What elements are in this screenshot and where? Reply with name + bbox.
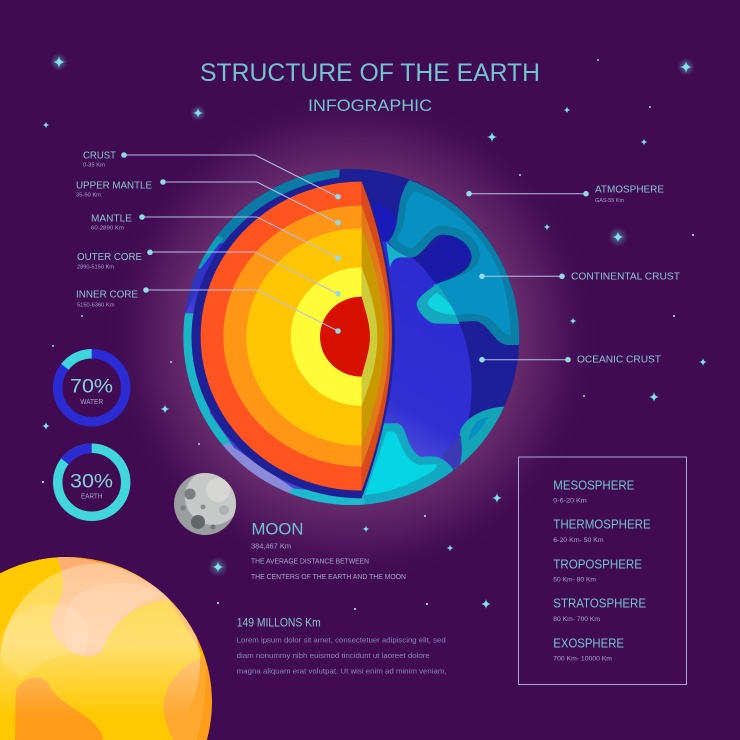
distance text: magna aliquam erat volutpat. Ut wisi enim ad minim veniam,: [237, 666, 447, 675]
continental crust: [388, 180, 519, 345]
donut: earth 30%: EARTH: [81, 494, 102, 501]
moon text: THE AVERAGE DISTANCE BETWEEN: [251, 559, 369, 566]
inner core line: [146, 290, 338, 331]
mesosphere: [553, 477, 635, 505]
south east island: [454, 406, 504, 470]
outer core line: [150, 252, 338, 294]
outer core label: [77, 251, 142, 270]
upper mantle line: [163, 182, 338, 223]
leader lines left: [121, 152, 341, 334]
moon: [174, 473, 236, 535]
right labels: [571, 183, 681, 366]
moon text: [251, 519, 406, 581]
highlighted ocean: [183, 240, 472, 505]
exosphere: [553, 635, 624, 662]
outer core label: 2890-5150 Km: [77, 264, 114, 270]
atmosphere layers panel: [518, 457, 686, 684]
outer core layer: [290, 267, 362, 406]
upper mantle label: [76, 179, 152, 199]
moon text: 384,467 Km: [251, 543, 291, 550]
troposphere: [553, 556, 642, 583]
inner core label: [76, 288, 138, 308]
atmosphere label: GAS-55 Km: [595, 198, 624, 204]
stratosphere: [553, 596, 646, 623]
inner core label: 5150-6360 Km: [77, 302, 115, 308]
lake: [418, 235, 471, 284]
crust layer: [200, 182, 362, 491]
sun left lobe: [0, 604, 78, 678]
distance text: diam nonummy nibh euismod tincidunt ut laoreet dolore: [237, 651, 430, 660]
crust line: [124, 155, 338, 197]
inner core label: INNER CORE: [76, 288, 138, 300]
sun lower blob: [15, 677, 103, 740]
donut: water 70%: [58, 354, 126, 422]
donut: water 70%: 70%: [70, 376, 113, 398]
cut face layers: [200, 182, 362, 491]
mantle label: MANTLE: [91, 213, 132, 225]
rim cyan bottom: [290, 488, 365, 505]
exosphere: 700 Km- 10000 Km: [553, 656, 612, 662]
mantle label: 60-2890 Km: [91, 225, 124, 231]
rim indigo: [185, 268, 205, 314]
crust label: 0-35 Km: [83, 163, 105, 169]
distance text: Lorem ipsum dolor sit amet, consectetuer adipiscing elit, sed: [237, 636, 446, 645]
sun: [0, 555, 212, 740]
troposphere: TROPOSPHERE: [553, 556, 642, 571]
inner core: [320, 297, 370, 377]
southern continent: [330, 423, 453, 507]
moon text: MOON: [252, 519, 304, 538]
cyan highlight land: [386, 242, 459, 324]
rim teal left: [183, 313, 234, 450]
upper mantle label: UPPER MANTLE: [76, 179, 152, 191]
navy shell: [191, 176, 395, 498]
cut side wedge: [362, 182, 392, 491]
sun upper lobe: [64, 583, 163, 655]
sun yellow surface: [0, 555, 203, 740]
stratosphere: 80 Km- 700 Km: [553, 617, 600, 623]
continental crust inner: [397, 192, 511, 336]
surface of the earth: [183, 170, 520, 505]
mantle line: [142, 217, 338, 258]
left labels: [76, 150, 152, 308]
leader lines right: [466, 191, 589, 363]
upper mantle label: 35-60 Km: [76, 193, 101, 199]
mesosphere: MESOSPHERE: [553, 477, 635, 492]
thermosphere: [553, 517, 651, 544]
title: STRUCTURE OF THE EARTH: [200, 59, 540, 87]
atmosphere label: ATMOSPHERE: [595, 183, 664, 195]
stratosphere: STRATOSPHERE: [553, 596, 646, 611]
mantle label: [91, 213, 132, 231]
earth globe cross-section: [183, 169, 520, 505]
mantle layer: [246, 228, 362, 446]
subtitle: INFOGRAPHIC: [308, 96, 432, 115]
small dark isle: [442, 435, 462, 469]
sun right blob: [163, 656, 206, 740]
mesosphere: 0-6-20 Km: [553, 499, 587, 505]
atmosphere label: [595, 183, 664, 204]
stars: [42, 53, 707, 610]
exosphere: EXOSPHERE: [553, 635, 624, 650]
donut: earth 30%: [58, 448, 126, 516]
rim periwinkle: [223, 442, 294, 494]
globe glow: [102, 87, 602, 587]
troposphere: 50 Km- 80 Km: [553, 577, 596, 583]
ocean patch top: [370, 203, 397, 242]
donut: water 70%: WATER: [80, 399, 103, 406]
upper mantle layer: [223, 206, 362, 467]
south east island inner: [468, 417, 488, 442]
oceanic crust label: OCEANIC CRUST: [577, 354, 662, 366]
moon text: THE CENTERS OF THE EARTH AND THE MOON: [251, 574, 406, 581]
distance text: [237, 616, 447, 675]
donut: earth 30%: 30%: [70, 470, 113, 492]
rim light teal: [196, 236, 223, 272]
crust label: [83, 150, 117, 169]
continental crust label: CONTINENTAL CRUST: [571, 271, 681, 283]
globe base ocean: [183, 169, 519, 505]
sun peach region: [51, 557, 173, 657]
sun light disc: [0, 563, 200, 712]
outer core label: OUTER CORE: [77, 251, 142, 263]
rim top-left: [210, 170, 340, 246]
line dots: [121, 152, 341, 334]
distance text: 149 MILLONS Km: [237, 616, 321, 630]
thermosphere: 6-20 Km- 50 Km: [553, 538, 604, 544]
thermosphere: THERMOSPHERE: [553, 517, 651, 532]
crust label: CRUST: [83, 150, 117, 162]
southern continent inner: [365, 432, 437, 495]
